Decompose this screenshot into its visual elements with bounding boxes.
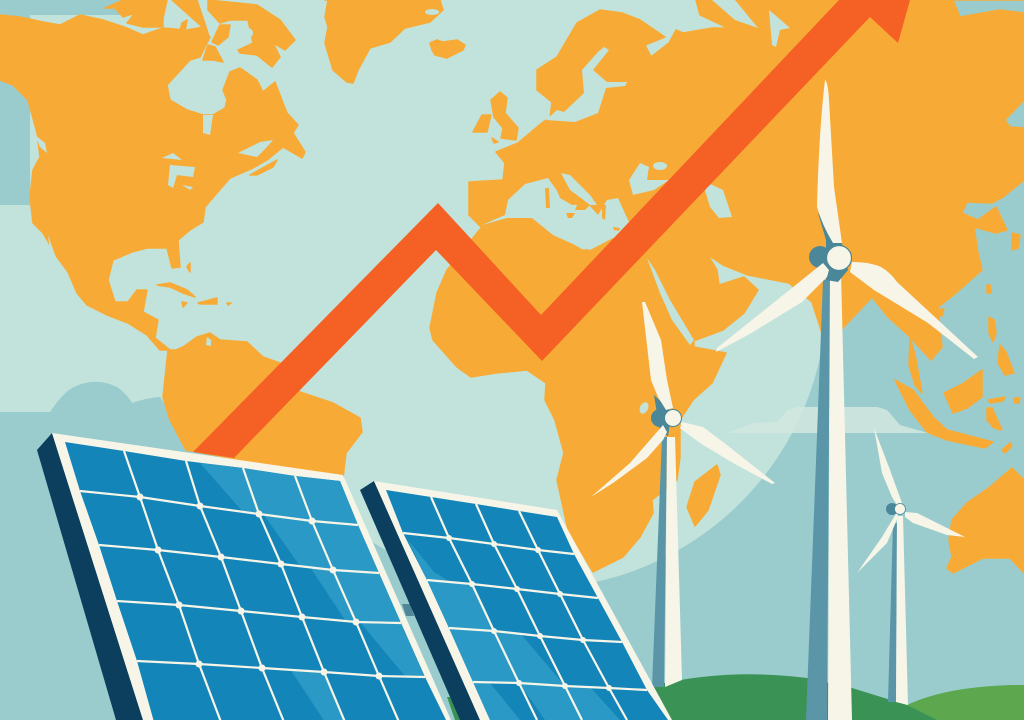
inland seas and lakes bbox=[35, 0, 790, 415]
left panel frame bbox=[52, 433, 451, 720]
iceland bbox=[430, 40, 465, 58]
small blades bbox=[857, 428, 965, 573]
cloud: right bbox=[728, 407, 928, 433]
black sea bbox=[629, 163, 669, 195]
cloud: left bbox=[50, 382, 170, 440]
solar panel: left bbox=[37, 433, 451, 720]
large blades bbox=[716, 80, 978, 359]
large tower bbox=[806, 272, 852, 720]
australia bbox=[947, 468, 1024, 573]
medium blades bbox=[591, 302, 775, 497]
medium hub shadow bbox=[651, 409, 669, 427]
adriatic bbox=[561, 173, 597, 205]
red sea bbox=[647, 258, 694, 345]
mediterranean bbox=[482, 178, 640, 250]
caribbean islands bbox=[157, 283, 195, 297]
newfoundland and nova scotia bbox=[283, 133, 305, 158]
left panel nodes bbox=[136, 494, 382, 680]
right panel nodes bbox=[446, 535, 612, 691]
wind turbine: small bbox=[857, 428, 965, 705]
right panel frame bbox=[374, 481, 672, 720]
hill: left bbox=[640, 674, 937, 720]
right panel side bbox=[360, 481, 480, 720]
mediterranean land bbox=[545, 176, 620, 231]
hill: right bbox=[880, 685, 1024, 720]
eurasia bbox=[469, 0, 1024, 370]
wind turbine: medium bbox=[591, 302, 775, 687]
right panel reflections bbox=[408, 540, 620, 720]
british isles bbox=[491, 92, 518, 140]
left panel grid bbox=[80, 451, 425, 720]
baltic bbox=[546, 47, 627, 122]
greenland bbox=[325, 0, 443, 83]
caspian sea bbox=[705, 183, 732, 218]
left panel cells bbox=[65, 442, 447, 720]
grass between panels bbox=[447, 697, 465, 720]
north america bbox=[0, 15, 298, 350]
south america bbox=[163, 333, 362, 478]
arrow: rising trend line bbox=[193, 0, 910, 458]
arctic islands bbox=[105, 0, 167, 27]
right panel cells bbox=[386, 490, 668, 720]
solar panel: right bbox=[360, 481, 672, 720]
large hub bbox=[826, 246, 852, 270]
small hub shadow bbox=[886, 503, 898, 515]
globe backdrop bbox=[0, 0, 827, 589]
southeast asia islands bbox=[895, 233, 1020, 453]
small hub bbox=[894, 504, 906, 514]
world map continents bbox=[0, 0, 1024, 573]
medium tower bbox=[652, 437, 682, 687]
medium hub bbox=[664, 410, 682, 426]
wind turbine: large bbox=[716, 80, 978, 720]
large nacelle shadow bbox=[809, 213, 848, 282]
panel mount bracket bbox=[402, 604, 414, 616]
arctic bays bbox=[712, 0, 758, 28]
left panel reflections bbox=[200, 463, 425, 720]
africa bbox=[430, 218, 726, 572]
small tower bbox=[888, 516, 908, 705]
right panel grid bbox=[403, 497, 647, 720]
left panel side bbox=[37, 433, 143, 720]
madagascar bbox=[687, 465, 720, 526]
